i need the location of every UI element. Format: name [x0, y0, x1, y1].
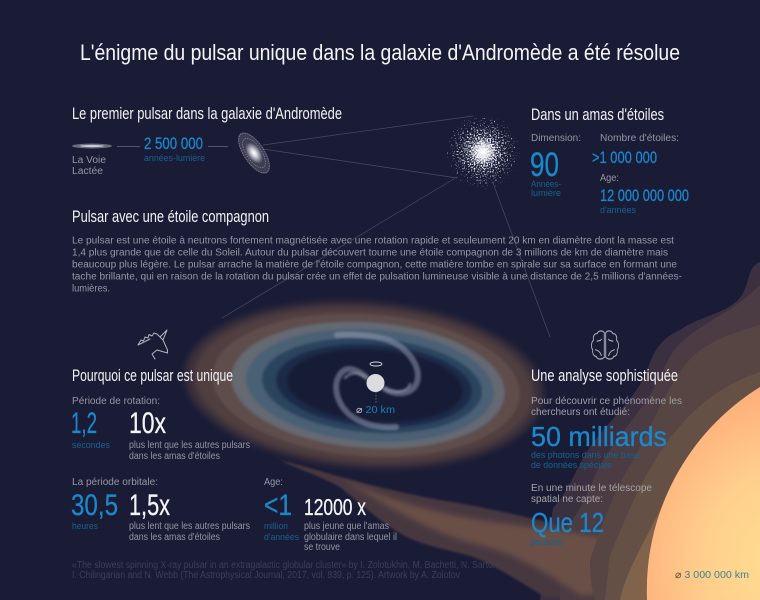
orbital period value: 30,5	[71, 489, 118, 522]
orbital note: plus lent que les autres pulsars	[129, 521, 250, 532]
age note: plus jeune que l'amas	[304, 521, 389, 532]
body text: beaucoup plus légère. Le pulsar arrache la matière de l'étoile compagnon, cette matière tombe en spirale sur sa surface en formant une	[72, 260, 677, 270]
star count value: >1 000 000	[592, 148, 657, 167]
intro text: Pour découvrir ce phénomène les	[531, 396, 682, 407]
rotation note: plus lent que les autres pulsars	[129, 440, 250, 451]
icon: star cluster	[446, 115, 520, 189]
citation: «The slowest spinning X-ray pulsar in an extragalactic globular cluster» by I. Zolotukhin, M. Bachetti, N. Sartore,	[72, 560, 503, 571]
dimension unit	[531, 179, 561, 199]
rotation period unit: secondes	[72, 440, 110, 451]
orbital multiplier: 1,5x	[129, 489, 170, 522]
photons unit: photons	[531, 537, 563, 548]
icon: Andromeda galaxy	[232, 127, 276, 179]
pulsar body	[366, 374, 384, 392]
label: Milky Way: Lactée	[72, 166, 103, 177]
age unit: d'années	[600, 205, 636, 216]
orbital note: dans les amas d'étoiles	[129, 532, 220, 543]
photons note: de données spéciale	[531, 460, 612, 471]
body text: 1,4 plus grande que de celle du Soleil. Autour du pulsar découvert tourne une étoile compagnon de 3 millions de km de diamètre mais	[72, 248, 668, 258]
panel: why this pulsar is unique	[71, 330, 397, 553]
age note: globulaire dans lequel il	[304, 532, 397, 543]
rotation multiplier: 10x	[129, 407, 166, 440]
telescope text: En une minute le télescope	[531, 483, 652, 494]
accretion disk	[179, 290, 549, 480]
rotation note	[129, 440, 250, 462]
age value: 12 000 000 000	[600, 186, 689, 205]
big number: 12 photons: Que 12	[531, 507, 604, 538]
companion star	[647, 387, 760, 600]
panel: pulsar with companion	[72, 208, 682, 294]
photons note: des photons dans une base	[531, 450, 640, 461]
age label: Age:	[600, 173, 619, 184]
age multiplier: 12000 x	[304, 494, 366, 520]
distance value: 2 500 000	[144, 134, 203, 153]
telescope text: spatial ne capte:	[531, 494, 603, 505]
citation: I. Chilingarian and N. Webb (The Astrophysical Journal, 2017, vol. 839, p. 125). Artwork by A. Zolotov	[72, 570, 460, 581]
pulsar diameter: ⌀ 20 km	[356, 405, 395, 416]
heading: Pourquoi ce pulsar est unique	[72, 367, 233, 385]
rotation note: dans les amas d'étoiles	[129, 451, 220, 462]
big number: photons: 50 milliards	[531, 421, 667, 452]
distance unit: années-lumière	[144, 153, 205, 164]
star count label: Nombre d'étoiles:	[600, 133, 679, 144]
title: L'énigme du pulsar unique dans la galaxie d'Andromède a été résolue	[80, 40, 680, 65]
orbital period unit: heures	[72, 521, 98, 532]
photons note	[531, 450, 640, 471]
age note	[304, 521, 397, 553]
orbital note	[129, 521, 250, 543]
companion star diameter: ⌀ 3 000 000 km	[675, 569, 749, 581]
age unit: d'années	[264, 532, 299, 543]
icon: Milky Way	[72, 144, 112, 148]
age unit: million	[264, 521, 288, 532]
panel: first pulsar in Andromeda	[72, 105, 342, 179]
nebula: matter stream from the companion star	[280, 262, 760, 600]
icon: brain	[591, 331, 619, 359]
icon: unicorn	[138, 330, 168, 359]
body text: lumières.	[72, 284, 110, 294]
heading: Le premier pulsar dans la galaxie d'Andromède	[72, 105, 342, 123]
dimension unit: lumière	[531, 188, 561, 199]
dimension value: 90	[530, 146, 559, 184]
heading: Une analyse sophistiquée	[531, 367, 678, 385]
orbital period label: La période orbitale:	[72, 477, 158, 488]
age label: Age:	[264, 477, 283, 488]
spiral arms	[336, 335, 418, 427]
intro text: chercheurs ont étudié:	[531, 407, 630, 418]
telescope text	[531, 483, 652, 505]
body text	[72, 236, 682, 294]
body text: Le pulsar est une étoile à neutrons fortement magnétisée avec une rotation rapide et seuleument 20 km en diamètre dont la masse est	[72, 236, 674, 246]
age value: <1	[264, 489, 292, 522]
body text: tache brillante, qui en raison de la rotation du pulsar crée un effet de pulsation lumineuse visible à une distance de 2,5 millions d'années-	[72, 272, 682, 282]
panel: sophisticated analysis	[531, 331, 682, 548]
citation	[72, 560, 503, 581]
dimension label: Dimension:	[531, 133, 581, 144]
dimension unit: Années-	[531, 179, 561, 190]
pulsar with spiral arms	[336, 335, 418, 427]
rotation period label: Période de rotation:	[72, 396, 160, 407]
heading: Pulsar avec une étoile compagnon	[72, 208, 269, 226]
intro text	[531, 396, 682, 418]
rotation arrow	[370, 362, 382, 366]
heading: Dans un amas d'étoiles	[531, 106, 664, 124]
distance line left	[117, 146, 140, 148]
rotation period value: 1,2	[71, 407, 97, 440]
label: Milky Way: La Voie	[72, 155, 106, 166]
distance line right	[208, 146, 228, 148]
age unit	[264, 521, 299, 543]
rotation axis	[375, 392, 377, 403]
panel: star cluster	[530, 106, 689, 216]
age note: se trouve	[304, 542, 340, 553]
label: Milky Way	[72, 155, 106, 177]
connector lines	[222, 116, 550, 337]
